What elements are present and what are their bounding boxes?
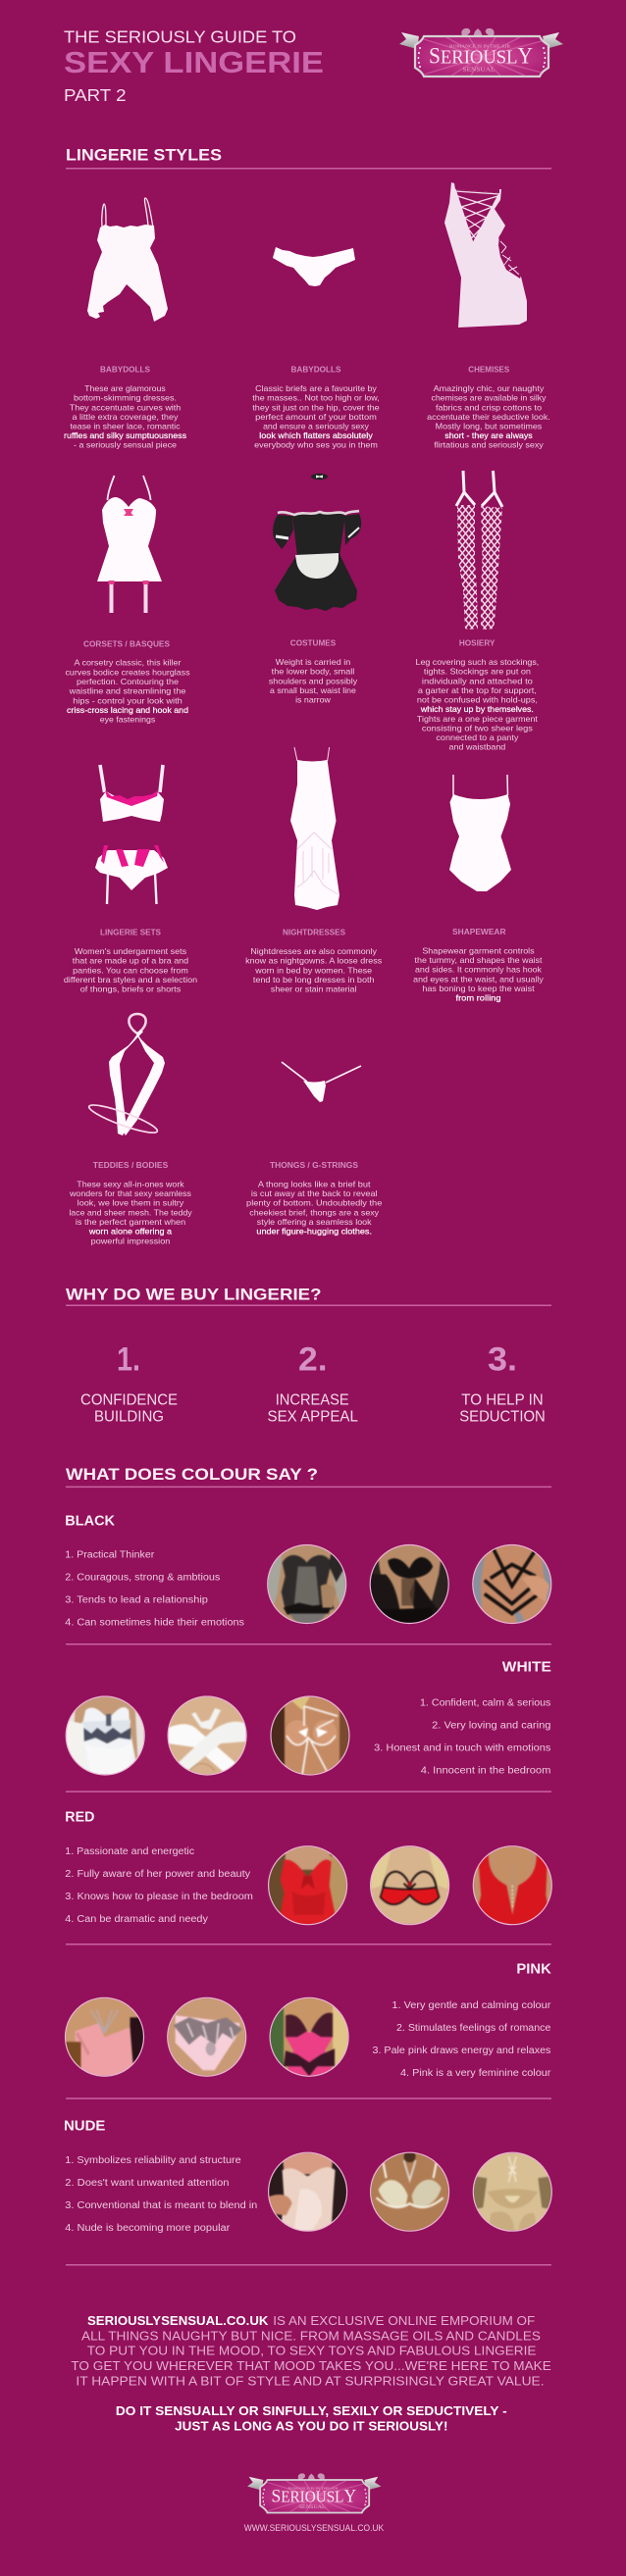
item: hosiery: [416, 471, 539, 752]
description: Tights are a one piece garment: [417, 715, 539, 724]
photo: nude shaping dress: [269, 2152, 347, 2231]
item: chemises: [427, 182, 550, 450]
photo: red bra: [371, 1846, 449, 1925]
icon: babydoll: [87, 198, 168, 322]
logo: Seriously Sensual: SENSUAL: [463, 67, 496, 73]
description: sheer or stain material: [271, 985, 357, 994]
description: from rolling: [455, 994, 501, 1003]
about text: [71, 2313, 551, 2388]
description: [65, 659, 190, 725]
logo: Seriously Sensual: [399, 28, 563, 76]
description: not be confused with hold-ups,: [417, 696, 538, 705]
item: teddies / bodies: [69, 1014, 193, 1245]
icon: chemise: [444, 182, 527, 328]
description: Weight is carried in: [276, 658, 351, 667]
description: waistline and streamlining the: [68, 687, 186, 696]
item: shapewear: SHAPEWEAR: [452, 928, 506, 936]
description: These are glamorous: [84, 384, 166, 393]
description: [413, 946, 545, 1003]
description: panties. You can choose from: [73, 966, 188, 975]
description: [252, 384, 380, 450]
description: [64, 384, 186, 450]
list: nude traits: 4. Nude is becoming more popular: [65, 2223, 231, 2234]
reason 1: BUILDING: [94, 1408, 164, 1425]
item: shapewear: [413, 775, 545, 1003]
about text: IT HAPPEN WITH A BIT OF STYLE AND AT SURPRISINGLY GREAT VALUE.: [76, 2373, 545, 2388]
list: white traits: 2. Very loving and caring: [432, 1720, 550, 1731]
colour panel: nude: [64, 2118, 551, 2234]
logo: footer: SERIOUSLY: [272, 2486, 357, 2506]
about text: IS AN EXCLUSIVE ONLINE EMPORIUM OF: [273, 2313, 535, 2328]
description: is cut away at the back to reveal: [251, 1189, 378, 1198]
description: Amazingly chic, our naughty: [434, 384, 545, 393]
item: thongs / g-strings: [246, 1062, 383, 1237]
description: individually and attached to: [422, 677, 533, 685]
photo: white gloves: [168, 1696, 246, 1775]
description: [245, 947, 382, 994]
section: what does colour say: [64, 1465, 551, 2265]
list: red traits: [65, 1846, 253, 1925]
description: which stay up by themselves.: [420, 705, 534, 714]
icon: thong: [282, 1062, 361, 1102]
icon: nightdress: [290, 747, 339, 910]
photo: black babydoll: [370, 1545, 448, 1624]
item: costumes: [269, 474, 361, 705]
reason 3: TO HELP IN: [461, 1391, 544, 1408]
colour panel: pink: [65, 1962, 551, 2079]
description: is narrow: [295, 696, 331, 705]
title: THE SERIOUSLY GUIDE TO: [64, 26, 296, 46]
photo: pink briefs with feathers: [168, 1997, 246, 2076]
description: These sexy all-in-ones work: [77, 1180, 185, 1188]
description: different bra styles and a selection: [64, 976, 198, 985]
item: corsets / basques: CORSETS / BASQUES: [83, 639, 171, 648]
description: a garter at the top for support,: [418, 686, 537, 695]
list: white traits: 4. Innocent in the bedroom: [421, 1765, 550, 1776]
description: consisting of two sheer legs: [422, 724, 533, 732]
description: know as nightgowns. A loose dress: [245, 957, 382, 966]
photo: black corset: [268, 1545, 346, 1624]
icon: bra and suspender set: [95, 765, 168, 904]
item: teddies / bodies: TEDDIES / BODIES: [93, 1161, 169, 1170]
photo: red lace dress: [269, 1846, 347, 1925]
item: thongs / g-strings: THONGS / G-STRINGS: [270, 1161, 359, 1170]
item: briefs: [252, 247, 380, 450]
description: [64, 947, 198, 994]
list: red traits: 1. Passionate and energetic: [65, 1846, 194, 1857]
photo: nude satin bra: [371, 2150, 449, 2231]
about text: SERIOUSLYSENSUAL.CO.UK: [87, 2313, 269, 2328]
list: nude traits: 2. Does't want unwanted attention: [65, 2178, 230, 2189]
colour panel: red: [65, 1809, 551, 1925]
photo: black strappy harness: [473, 1545, 551, 1624]
description: that are made up of a bra and: [73, 957, 189, 966]
list: red traits: 2. Fully aware of her power and beauty: [65, 1869, 250, 1880]
title: SEXY LINGERIE: [64, 45, 324, 79]
icon: fishnet stockings: [456, 471, 502, 630]
description: perfect amount of your bottom: [255, 413, 377, 422]
description: tend to be long dresses in both: [253, 976, 375, 985]
description: [246, 1180, 383, 1237]
description: bottom-skimming dresses.: [74, 394, 177, 403]
description: wonders for that sexy seamless: [69, 1189, 191, 1198]
icon: teddy: [87, 1014, 165, 1137]
description: of thongs, briefs or shorts: [80, 985, 181, 994]
description: a little extra coverage, they: [73, 413, 179, 422]
list: black traits: [65, 1550, 244, 1628]
description: connected to a panty: [436, 733, 519, 742]
description: look, we love them in sultry: [78, 1199, 184, 1208]
item: chemises: CHEMISES: [468, 366, 510, 375]
description: tease in sheer lace, romantic: [71, 422, 181, 431]
reason 3: SEDUCTION: [459, 1408, 546, 1425]
item: lingerie sets: LINGERIE SETS: [100, 929, 162, 937]
list: nude traits: [65, 2155, 257, 2234]
list: pink traits: 1. Very gentle and calming colour: [391, 2000, 551, 2011]
description: plenty of bottom. Undoubtedly the: [246, 1199, 383, 1208]
description: chemises are available in silky: [432, 394, 547, 403]
item: corsets / basques: [65, 476, 190, 725]
list: black traits: 1. Practical Thinker: [65, 1550, 155, 1561]
icon: maid costume: [273, 474, 361, 611]
description: curves bodice creates hourglass: [65, 668, 190, 677]
list: white traits: [374, 1697, 550, 1776]
logo: footer: SENSUAL: [299, 2505, 326, 2510]
logo: Seriously Sensual: SERIOUSLY: [429, 43, 533, 69]
description: - a seriously sensual piece: [74, 441, 177, 450]
description: everybody who ses you in them: [254, 441, 378, 450]
reason 3: [459, 1340, 546, 1425]
icon: corset: [97, 476, 162, 613]
description: is the perfect garment when: [76, 1218, 186, 1227]
item: briefs: BABYDOLLS: [290, 366, 341, 375]
about text: TO PUT YOU IN THE MOOD, TO SEXY TOYS AND FABULOUS LINGERIE: [87, 2344, 537, 2358]
description: style offering a seamless look: [257, 1218, 373, 1227]
colour panel: nude: NUDE: [64, 2118, 106, 2134]
description: Women's undergarment sets: [75, 947, 186, 956]
description: fabrics and crisp cottons to: [436, 403, 542, 412]
description: Leg covering such as stockings,: [416, 658, 539, 667]
description: look which flatters absolutely: [259, 431, 374, 440]
description: cheekiest brief, thongs are a sexy: [249, 1208, 380, 1217]
description: A thong looks like a brief but: [258, 1180, 371, 1188]
colour panel: pink: PINK: [516, 1962, 551, 1978]
description: tights. Stockings are put on: [424, 668, 531, 677]
description: has boning to keep the waist: [422, 985, 535, 993]
list: black traits: 4. Can sometimes hide their emotions: [65, 1617, 244, 1628]
description: eye fastenings: [100, 716, 155, 725]
heading: why do we buy lingerie: WHY DO WE BUY LINGERIE?: [66, 1286, 322, 1304]
title: PART 2: [64, 85, 126, 105]
reason 2: SEX APPEAL: [267, 1408, 358, 1425]
icon: briefs: [273, 247, 355, 286]
description: [427, 384, 550, 450]
colour panel: white: [66, 1659, 551, 1776]
icon: shapewear body: [449, 775, 511, 891]
list: red traits: 3. Knows how to please in the bedroom: [65, 1892, 253, 1902]
description: criss-cross lacing and hook and: [67, 706, 188, 715]
description: worn in bed by women. These: [254, 966, 373, 975]
item: hosiery: HOSIERY: [459, 639, 496, 648]
reason 2: [267, 1340, 358, 1425]
item: babydolls: BABYDOLLS: [100, 366, 151, 375]
description: shoulders and possibly: [269, 677, 358, 685]
description: the lower body, small: [272, 668, 354, 677]
colour panel: red: RED: [65, 1809, 94, 1825]
header: [64, 26, 563, 105]
colour panel: black: [65, 1513, 551, 1628]
description: They accentuate curves with: [70, 403, 182, 412]
photo: red plunge dress: [473, 1846, 551, 1925]
description: [69, 1180, 193, 1245]
list: pink traits: 2. Stimulates feelings of romance: [396, 2023, 551, 2034]
description: A corsetry classic, this killer: [75, 659, 182, 668]
reason 1: 1.: [117, 1340, 140, 1378]
logo: Seriously Sensual: ROMANCE IS IN THE AIR: [449, 44, 510, 49]
description: hips - control your look with: [73, 696, 183, 705]
title: [64, 26, 324, 105]
description: Classic briefs are a favourite by: [255, 384, 378, 393]
list: pink traits: [373, 2000, 551, 2079]
description: ruffles and silky sumptuousness: [64, 431, 186, 440]
description: lace and sheer mesh. The teddy: [69, 1208, 193, 1217]
heading: what does colour say: WHAT DOES COLOUR SAY ?: [66, 1465, 318, 1484]
about text: TO GET YOU WHEREVER THAT MOOD TAKES YOU...WE'RE HERE TO MAKE: [71, 2358, 551, 2373]
closing message: JUST AS LONG AS YOU DO IT SERIOUSLY!: [175, 2418, 447, 2433]
list: black traits: 3. Tends to lead a relationship: [65, 1595, 208, 1606]
colour panel: black: BLACK: [65, 1513, 116, 1529]
description: flirtatious and seriously sexy: [434, 441, 545, 450]
description: and eyes at the waist, and usually: [413, 975, 545, 984]
logo: footer: ROMANCE IS IN THE AIR: [288, 2487, 339, 2491]
section: why do we buy lingerie: [66, 1286, 551, 1425]
reason 1: CONFIDENCE: [80, 1391, 178, 1408]
description: Mostly long, but sometimes: [436, 422, 542, 431]
item: babydolls: [64, 198, 186, 450]
description: accentuate their seductive look.: [427, 413, 550, 422]
infographic: [64, 27, 563, 2531]
description: the masses.. Not too high or low,: [252, 394, 380, 403]
list: white traits: 3. Honest and in touch with emotions: [374, 1743, 550, 1753]
description: and sides. It commonly has hook: [415, 966, 543, 975]
closing message: DO IT SENSUALLY OR SINFULLY, SEXILY OR SEDUCTIVELY -: [116, 2403, 507, 2418]
photo: white camisole: [66, 1696, 144, 1775]
description: short - they are always: [444, 431, 533, 440]
description: under figure-hugging clothes.: [256, 1228, 372, 1237]
list: nude traits: 1. Symbolizes reliability and structure: [65, 2155, 241, 2166]
reason 2: INCREASE: [276, 1391, 349, 1408]
photo: pink dress: [65, 1997, 143, 2076]
reason 1: [80, 1340, 178, 1425]
description: and waistband: [449, 743, 506, 752]
description: and ensure a seriously sexy: [263, 422, 370, 431]
logo: footer: [247, 2473, 381, 2513]
description: powerful impression: [91, 1237, 171, 1245]
item: costumes: COSTUMES: [290, 639, 337, 648]
description: [416, 658, 539, 752]
description: Shapewear garment controls: [422, 946, 535, 955]
photo: hot pink body: [270, 1997, 348, 2076]
item: nightdresses: [245, 747, 382, 994]
description: worn alone offering a: [88, 1228, 173, 1237]
list: red traits: 4. Can be dramatic and needy: [65, 1914, 208, 1925]
reason 2: 2.: [298, 1340, 328, 1378]
list: black traits: 2. Couragous, strong & ambtious: [65, 1573, 220, 1584]
description: [269, 658, 358, 705]
section: lingerie styles: [64, 146, 551, 1245]
description: a small bust, waist line: [270, 686, 356, 695]
closing message: [116, 2403, 507, 2433]
description: Nightdresses are also commonly: [250, 947, 378, 956]
item: lingerie sets: [64, 765, 198, 994]
about text: ALL THINGS NAUGHTY BUT NICE. FROM MASSAGE OILS AND CANDLES: [81, 2328, 541, 2343]
colour panel: white: WHITE: [502, 1659, 551, 1675]
heading: lingerie styles: LINGERIE STYLES: [66, 146, 222, 165]
list: pink traits: 4. Pink is a very feminine colour: [400, 2068, 551, 2079]
item: nightdresses: NIGHTDRESSES: [283, 929, 346, 937]
website url: WWW.SERIOUSLYSENSUAL.CO.UK: [244, 2523, 385, 2534]
list: pink traits: 3. Pale pink draws energy and relaxes: [373, 2046, 550, 2056]
description: they sit just on the hip, cover the: [252, 403, 380, 412]
list: white traits: 1. Confident, calm & serious: [420, 1697, 550, 1708]
photo: nude lace-up corset: [473, 2152, 551, 2231]
reason 3: 3.: [488, 1340, 517, 1378]
photo: white straps: [271, 1696, 349, 1775]
list: nude traits: 3. Conventional that is meant to blend in: [65, 2200, 257, 2211]
description: perfection. Contouring the: [77, 678, 179, 686]
description: the tummy, and shapes the waist: [414, 956, 543, 965]
